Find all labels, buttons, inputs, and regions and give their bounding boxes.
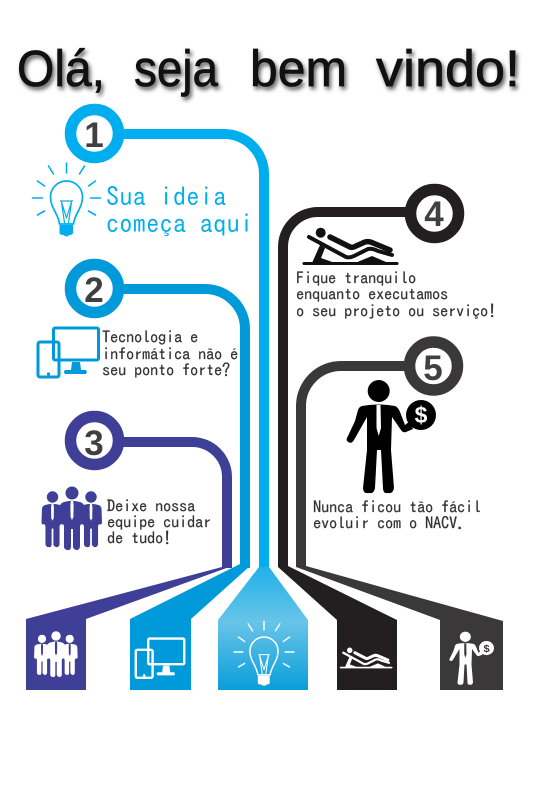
text: equipe: de tudo! (107, 529, 171, 546)
bottom icon: team (34, 631, 78, 677)
title (17, 40, 520, 97)
connector 1: cyan (115, 134, 308, 690)
bottom icon: devices (136, 639, 184, 678)
icon: businessman with coin (347, 380, 436, 493)
badge 1 (70, 110, 118, 158)
title: Olá, (17, 40, 105, 97)
badge 3 (70, 416, 118, 464)
title: vindo! (376, 40, 520, 97)
text: tecnologia: Tecnologia e (102, 328, 198, 345)
connector 3: purple (26, 442, 232, 690)
text: tranquilo: enquanto executamos (296, 285, 448, 302)
badge 2 (70, 264, 118, 312)
badge 5: 5 (423, 349, 443, 388)
bottom icon: light bulb (234, 621, 294, 686)
connector 5: dark grey (296, 366, 503, 690)
icon: team (42, 486, 102, 550)
bottom icon: person reclining (341, 648, 392, 668)
title: seja (134, 40, 219, 97)
icon: person reclining (304, 228, 397, 264)
connector 4: black (278, 212, 415, 690)
text: tecnologia: seu ponto forte? (102, 361, 230, 378)
text: sua ideia: começa aqui (106, 211, 253, 237)
text: nacv: Nunca ficou tão fácil (313, 498, 481, 515)
connector 2: blue (115, 289, 250, 690)
badge 3: 3 (84, 424, 104, 463)
title: bem (250, 40, 347, 97)
text: tecnologia: informática não é (102, 345, 238, 362)
icon: devices (38, 328, 98, 377)
badge 5 (410, 342, 458, 390)
badge 2: 2 (84, 271, 104, 310)
icon: light bulb (32, 163, 100, 236)
badge 4 (410, 190, 458, 238)
text: sua ideia: Sua ideia (106, 184, 227, 210)
bottom icon: businessman with coin (449, 632, 494, 685)
text: equipe: Deixe nossa (107, 497, 195, 514)
text: tranquilo: o seu projeto ou serviço! (296, 302, 496, 319)
bottom icon: businessman with coin: $ (483, 643, 490, 655)
text: nacv: evoluir com o NACV. (313, 514, 465, 531)
text: equipe: equipe cuidar (107, 513, 211, 530)
text: tranquilo: Fique tranquilo (296, 269, 416, 286)
badge 1: 1 (84, 116, 104, 155)
icon: businessman with coin: $ (415, 402, 428, 428)
badge 4: 4 (424, 195, 444, 234)
